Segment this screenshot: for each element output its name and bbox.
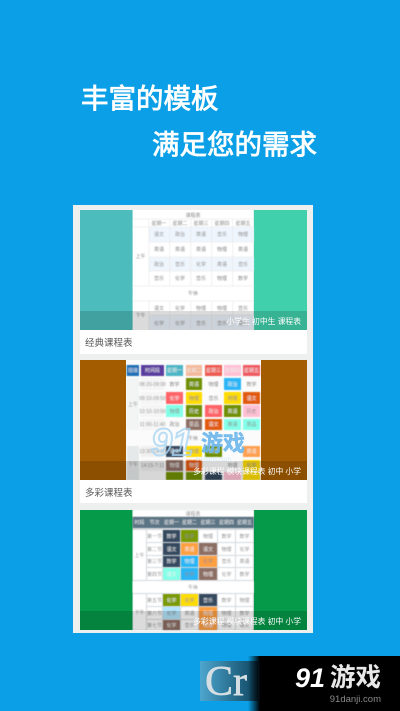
- module table blocks: 物理: [221, 610, 232, 617]
- classic table grid: 音乐: [217, 320, 227, 327]
- module table blocks: 午休: [188, 584, 198, 591]
- module table blocks: 课程表: [185, 510, 201, 518]
- watermark: 91游戏: 91danji.com: [196, 456, 231, 463]
- colorful table blocks: 地理: [227, 462, 238, 469]
- colorful table blocks: 化学: [169, 395, 180, 402]
- classic table grid: 英语: [217, 261, 227, 268]
- colorful table blocks: 语文: [208, 421, 219, 428]
- module table blocks: 物理: [184, 558, 195, 565]
- watermark: 91游戏: 游戏: [201, 431, 245, 456]
- module table blocks: 语文: [239, 622, 250, 629]
- module table blocks: 数学: [166, 558, 177, 565]
- module table blocks: 第四节: [147, 571, 162, 578]
- classic table grid: 课程表: [185, 212, 201, 219]
- classic table grid: 物理: [217, 305, 227, 312]
- module table blocks: 数学: [239, 610, 250, 617]
- module table blocks: 数学: [239, 533, 250, 540]
- classic table grid: 星期二: [172, 221, 188, 227]
- colorful table blocks: 政治: [227, 381, 238, 388]
- classic table grid: 语文: [238, 320, 248, 327]
- colorful table blocks: 英语: [246, 448, 257, 455]
- colorful table blocks: 11:00-11:40: [140, 422, 166, 428]
- module table blocks: 星期四: [219, 520, 234, 526]
- module table blocks: 物理: [203, 571, 213, 578]
- classic table grid: 化学: [175, 320, 185, 327]
- classic table grid: 化学: [175, 275, 185, 282]
- module overlay caption: 多彩课程 模块课程表 初中 小学: [193, 616, 301, 626]
- module table blocks: 上午: [134, 552, 145, 559]
- module table blocks: 第五节: [147, 597, 162, 604]
- classic table grid: 音乐: [175, 261, 185, 268]
- classic table grid: 上午: [135, 253, 146, 260]
- module table blocks: 第六节: [147, 610, 162, 617]
- colorful table blocks: 13:30-14:10: [139, 449, 166, 455]
- colorful table blocks: 语文: [246, 395, 257, 402]
- module table blocks: 化学: [166, 622, 177, 629]
- module table blocks: 第三节: [147, 558, 162, 565]
- classic caption: 经典课程表: [85, 337, 133, 349]
- module table blocks: 化学: [166, 597, 177, 604]
- module table blocks: 化学: [184, 597, 195, 604]
- classic table grid: 化学: [196, 261, 206, 268]
- title: [81, 83, 317, 160]
- classic table grid: 物理: [217, 275, 227, 282]
- module table blocks: 语文: [166, 571, 177, 578]
- colorful table blocks: 下午: [128, 461, 138, 468]
- classic caption: [80, 330, 307, 354]
- classic table grid: 音乐: [238, 305, 248, 312]
- classic table grid: 音乐: [154, 275, 164, 282]
- module table blocks: 物理: [239, 597, 250, 604]
- colorful table blocks: 历史: [246, 408, 257, 415]
- colorful table blocks: 时间段: [145, 367, 160, 374]
- classic table grid: 物理: [238, 231, 248, 238]
- colorful table blocks: 英语: [189, 381, 199, 388]
- colorful table blocks: 英语: [227, 421, 238, 428]
- classic table grid: 数学: [238, 275, 248, 282]
- module table blocks: 时段: [134, 519, 145, 526]
- classic table grid: 星期一: [151, 221, 167, 227]
- panel: template card: [73, 205, 313, 633]
- colorful table blocks: 数学: [169, 381, 180, 388]
- logo: 91 games: 游戏: [330, 664, 381, 692]
- module table blocks: 下午: [134, 609, 145, 616]
- colorful table blocks: 历史: [189, 408, 199, 415]
- classic table grid: [133, 212, 254, 330]
- classic table grid: 物理: [217, 246, 227, 253]
- module table blocks: 化学: [166, 610, 177, 617]
- colorful table blocks: 星期二: [186, 368, 202, 374]
- panel: classic timetable: [80, 210, 307, 354]
- title: 丰富的模板: [81, 83, 218, 114]
- colorful table blocks: 星期四: [225, 368, 240, 374]
- colorful table blocks: 物理: [208, 381, 219, 388]
- title: 满足您的需求: [152, 129, 317, 160]
- colorful caption: [80, 480, 307, 503]
- module table blocks: 物理: [203, 533, 213, 540]
- module table blocks: 数学: [239, 571, 250, 578]
- classic overlay caption: 小学生 初中生 课程表: [226, 316, 301, 326]
- classic table grid: 语文: [154, 231, 164, 238]
- classic table grid: 化学: [175, 305, 185, 312]
- colorful table blocks: 08:20-09:00: [139, 382, 166, 388]
- colorful table blocks: 上午: [128, 401, 138, 408]
- module table blocks: 物理: [203, 622, 213, 629]
- classic table grid: 音乐: [196, 320, 206, 327]
- logo: 91 games: [248, 656, 400, 711]
- classic table grid: 星期三: [193, 221, 209, 227]
- colorful overlay caption: 多彩课程 模块课程表 初中 小学: [193, 466, 301, 476]
- classic overlay caption: [80, 311, 307, 330]
- logo: 91 games: 91danji.com: [330, 694, 381, 705]
- module table blocks: 化学: [239, 546, 250, 553]
- classic table grid: 政治: [175, 231, 185, 238]
- classic table grid: 英语: [154, 246, 164, 253]
- classic table grid: 英语: [238, 246, 248, 253]
- module table blocks: 化学: [203, 558, 213, 565]
- colorful table blocks: 地理: [189, 448, 199, 455]
- module table blocks: 化学: [184, 533, 195, 540]
- classic table grid: 音乐: [196, 275, 206, 282]
- colorful table blocks: 数学: [246, 381, 257, 388]
- colorful table blocks: 思品: [189, 422, 199, 428]
- classic table grid: 星期五: [235, 221, 251, 227]
- colorful table blocks: 音乐: [208, 395, 219, 402]
- module table blocks: 星期一: [164, 520, 179, 526]
- module table blocks: 星期三: [200, 520, 216, 526]
- classic table grid: 化学: [154, 320, 164, 327]
- logo: partner image: Cr: [205, 659, 247, 705]
- logo: 91 games: 91: [295, 663, 325, 693]
- module table blocks: 音乐: [203, 597, 213, 604]
- classic table grid: 下午: [135, 312, 146, 319]
- colorful table blocks: 星期三: [206, 368, 221, 374]
- colorful table blocks: 政治: [208, 408, 219, 415]
- module table blocks: 英语: [184, 546, 195, 553]
- classic table grid: 英语: [196, 246, 206, 253]
- module table blocks: 数学: [221, 533, 232, 540]
- module table blocks: 星期五: [237, 520, 252, 526]
- classic table grid: 星期四: [214, 221, 230, 227]
- colorful table blocks: 英语: [208, 448, 219, 455]
- classic table grid: 政治: [154, 261, 164, 268]
- colorful table blocks: 星期一: [167, 368, 182, 374]
- module table blocks: 数学: [221, 597, 232, 604]
- colorful table blocks: 思品: [246, 422, 257, 428]
- colorful table blocks: 午休: [188, 435, 198, 442]
- classic table grid: 音乐: [217, 231, 227, 238]
- classic table grid: 午休: [188, 290, 198, 297]
- watermark: 91游戏: [151, 422, 245, 464]
- module table blocks: 物理: [203, 610, 213, 617]
- module table blocks: 节次: [149, 519, 160, 526]
- module table blocks: 物理: [221, 546, 232, 553]
- module table blocks: 语文: [166, 546, 177, 553]
- classic table grid: 英语: [175, 246, 185, 253]
- panel: colorful timetable: [80, 360, 307, 503]
- panel: module timetable: [80, 510, 307, 630]
- colorful overlay caption: [80, 461, 307, 480]
- classic table grid: 英语: [196, 231, 206, 238]
- colorful table blocks: 英语: [227, 408, 238, 415]
- colorful table blocks: 语文: [169, 448, 180, 455]
- classic table grid: 音乐: [238, 261, 248, 268]
- colorful table blocks: [127, 365, 260, 480]
- colorful table blocks: 10:10-10:50: [139, 409, 166, 415]
- module overlay caption: [80, 611, 307, 630]
- module table blocks: 数学: [166, 533, 177, 540]
- module table blocks: 化学: [221, 571, 232, 578]
- colorful table blocks: 班级: [128, 367, 138, 374]
- watermark: 91游戏: 91: [151, 422, 193, 464]
- colorful table blocks: 星期五: [244, 368, 259, 374]
- colorful table blocks: 物理: [169, 462, 180, 469]
- module table blocks: 第一节: [147, 533, 162, 540]
- colorful table blocks: 物理: [189, 462, 199, 469]
- classic table grid: 物理: [196, 305, 206, 312]
- colorful table blocks: 物理: [189, 395, 199, 402]
- module table blocks: 物理: [221, 622, 232, 629]
- module table blocks: 音乐: [221, 558, 232, 565]
- module table blocks: 第七节: [147, 622, 162, 629]
- module table blocks: 化学: [184, 571, 195, 578]
- module table blocks: [133, 510, 254, 630]
- colorful table blocks: 化学: [246, 462, 257, 469]
- colorful table blocks: 政治: [169, 421, 180, 428]
- colorful table blocks: 09:10-09:50: [139, 396, 166, 402]
- module table blocks: 音乐: [184, 622, 195, 629]
- module table blocks: 第二节: [147, 546, 162, 553]
- module table blocks: 星期二: [182, 520, 197, 526]
- colorful table blocks: 地理: [227, 395, 238, 402]
- colorful table blocks: 14:15-?:11: [141, 463, 164, 469]
- classic table grid: 语文: [154, 305, 164, 312]
- module table blocks: 语文: [203, 546, 213, 553]
- module table blocks: 英语: [239, 558, 250, 565]
- colorful table blocks: 物理: [169, 408, 180, 415]
- colorful caption: 多彩课程表: [85, 487, 133, 499]
- module table blocks: 英语: [184, 610, 195, 617]
